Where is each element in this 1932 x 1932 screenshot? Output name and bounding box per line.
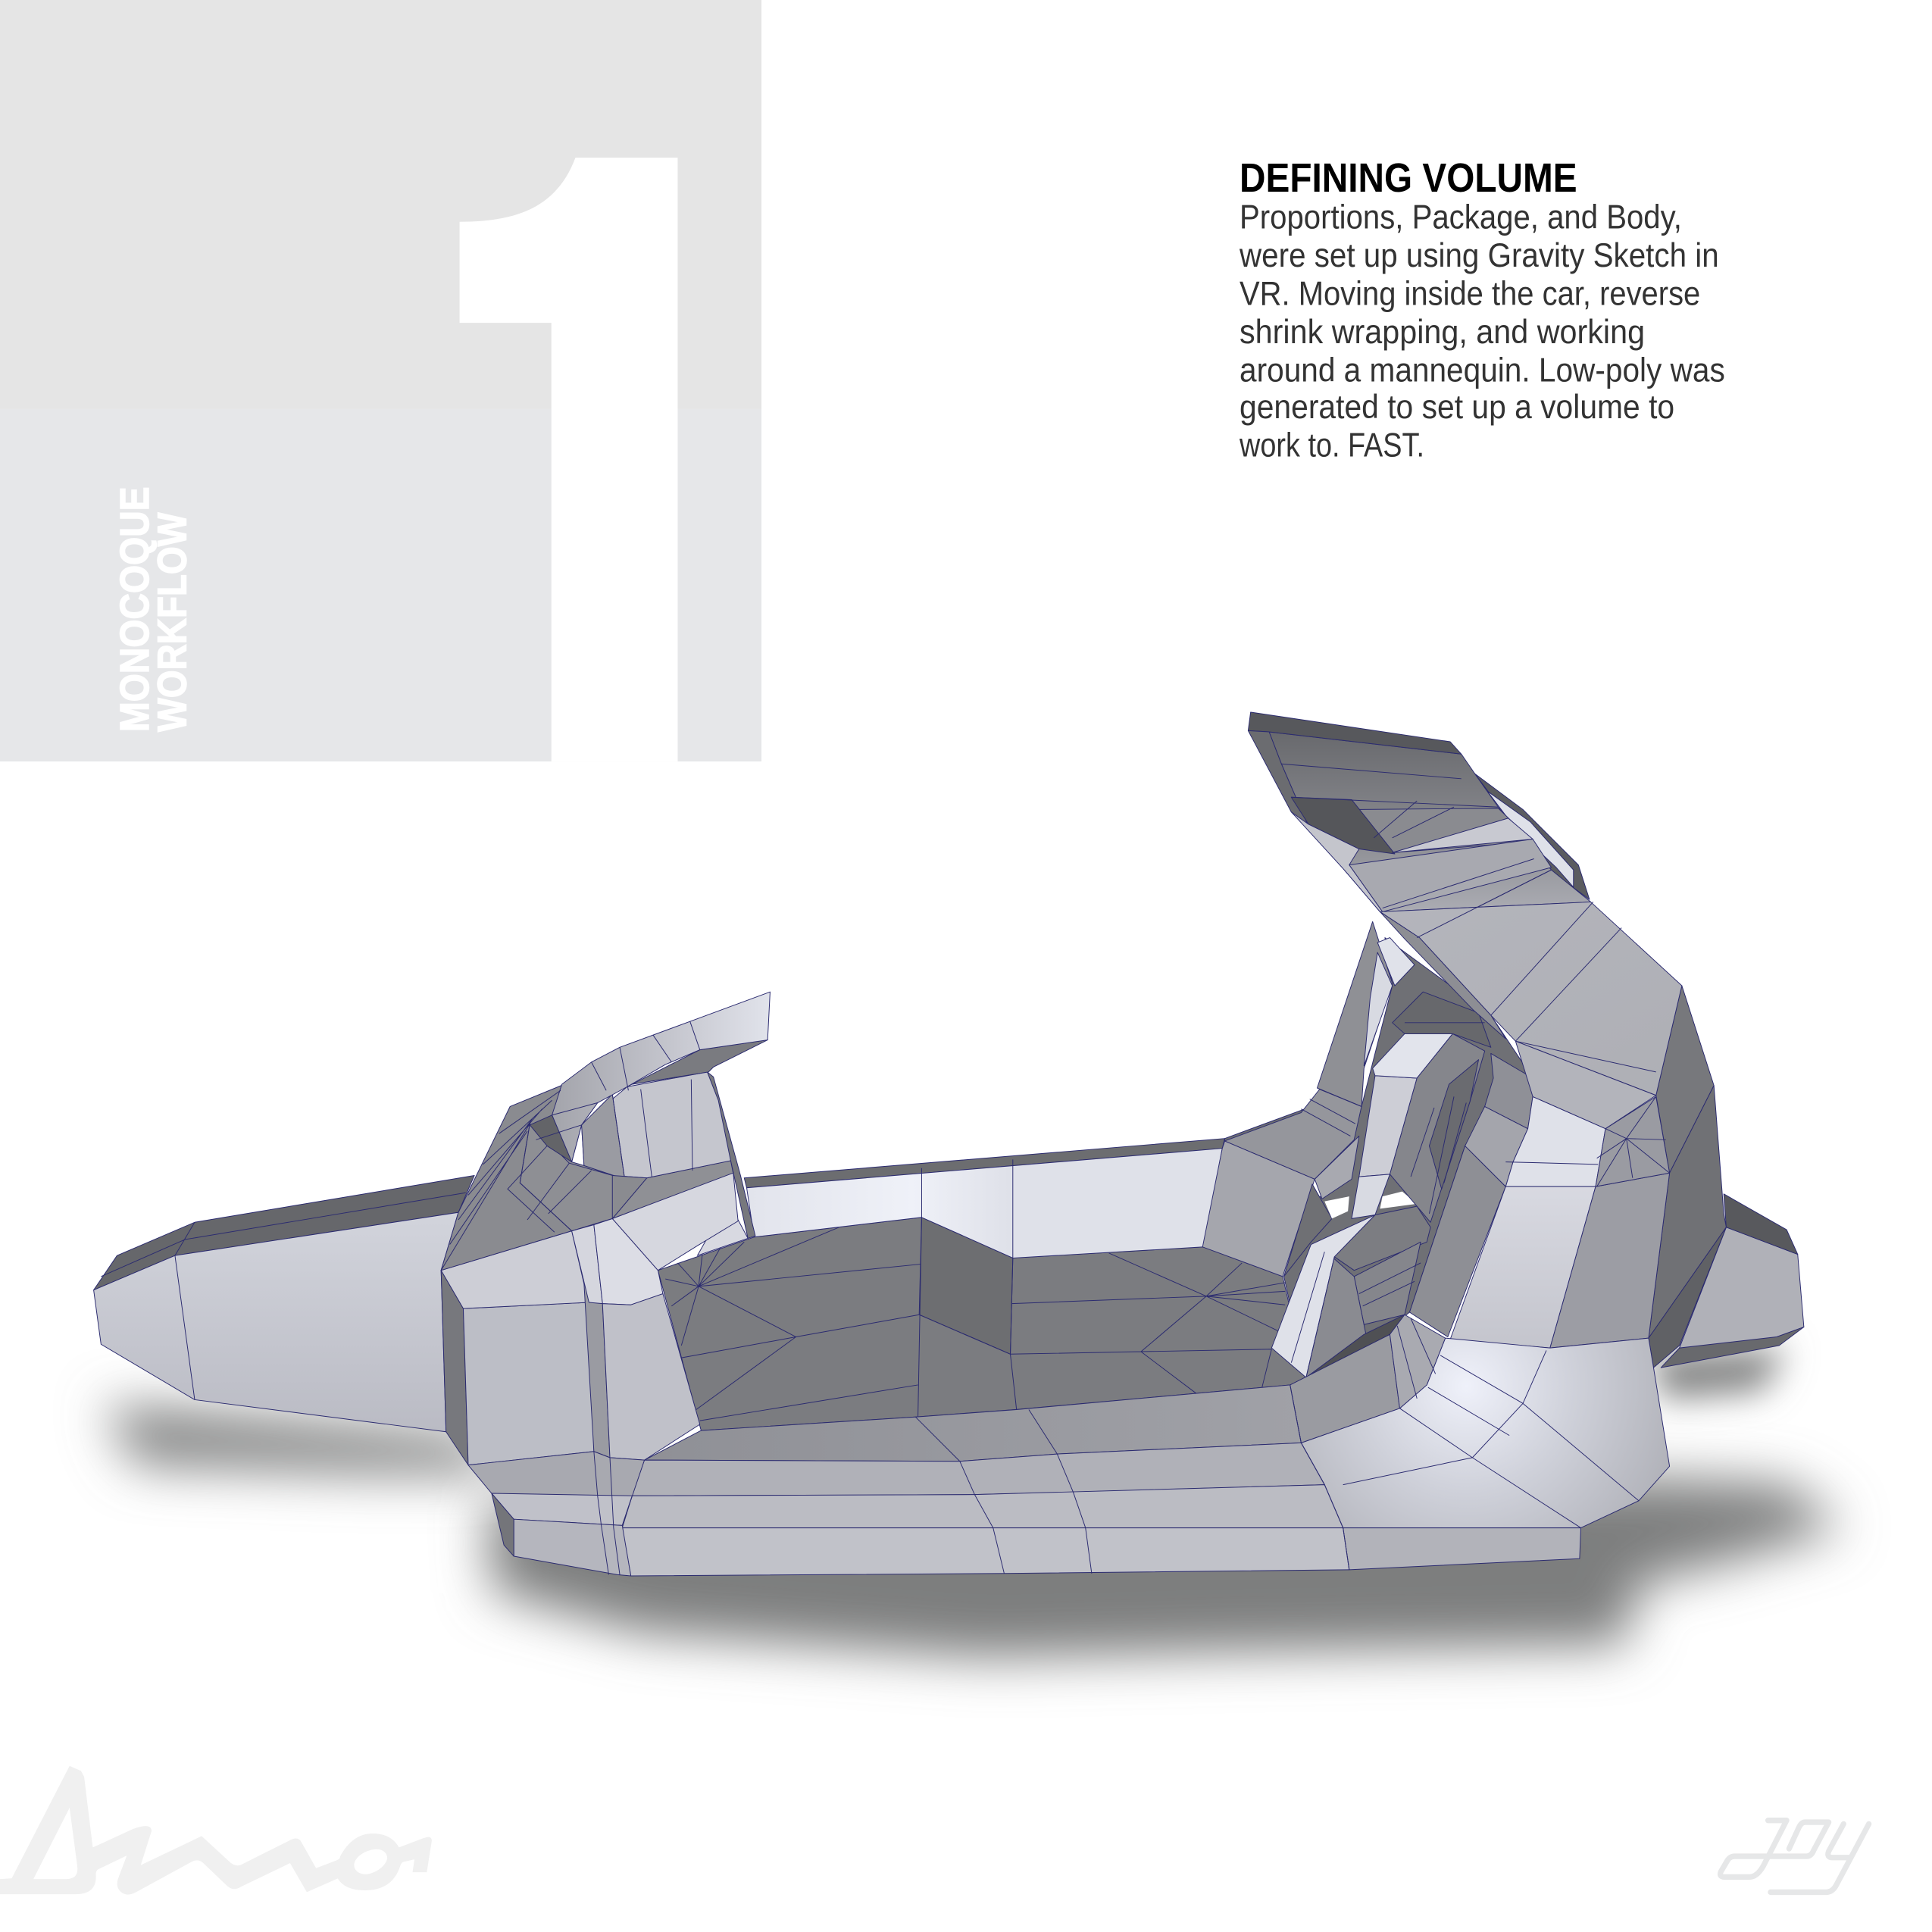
cowl fan and dash arch	[441, 992, 770, 1271]
front pillar light panel	[612, 1072, 755, 1271]
low-poly car model	[94, 712, 1804, 1576]
left pillar and side panels	[1225, 921, 1417, 1277]
seat back	[1352, 992, 1491, 1222]
side sill strips	[622, 1385, 1349, 1576]
text block: description: around a mannequin. Low-poly was	[1240, 352, 1725, 389]
bright rear corner	[1301, 1338, 1670, 1570]
vertical label: monocoque workflow: WORKFLOW	[150, 512, 195, 732]
text block: description: generated to set up a volume to	[1240, 389, 1674, 426]
nose section	[94, 1175, 474, 1432]
arch column and rear quarter	[1409, 1041, 1670, 1348]
ground shadows	[105, 1349, 1842, 1657]
logo: joy mark	[1721, 1821, 1869, 1892]
text block: description: Proportions, Package, and Body,	[1240, 199, 1682, 236]
panel: grey number block	[0, 0, 761, 761]
rear dark panels	[1649, 986, 1726, 1368]
logo: anno signature	[0, 1766, 432, 1895]
seat cushion and console	[1271, 1206, 1430, 1377]
text block: description: work to. FAST.	[1239, 427, 1424, 464]
spoiler	[1248, 712, 1591, 938]
front wheel arch and cowl	[441, 1218, 700, 1576]
heading: defining volume: DEFINING VOLUME	[1240, 155, 1577, 201]
large numeral 1	[460, 158, 677, 761]
text block: description: were set up using Gravity Sketch in	[1239, 237, 1719, 274]
vertical label: monocoque workflow	[112, 486, 195, 732]
text block: description: VR. Moving inside the car, reverse	[1240, 276, 1700, 313]
text block: description	[1239, 199, 1725, 464]
wheel arch inner corner	[1290, 1315, 1446, 1443]
roof panels	[1380, 870, 1682, 1096]
tail fin	[1661, 1194, 1804, 1368]
back wall with rail	[744, 1109, 1315, 1277]
interior behind seat	[1284, 938, 1533, 1377]
text block: description: shrink wrapping, and working	[1240, 314, 1645, 351]
cabin floor	[658, 1218, 1306, 1430]
vertical label: monocoque workflow: MONOCOQUE	[112, 486, 158, 732]
